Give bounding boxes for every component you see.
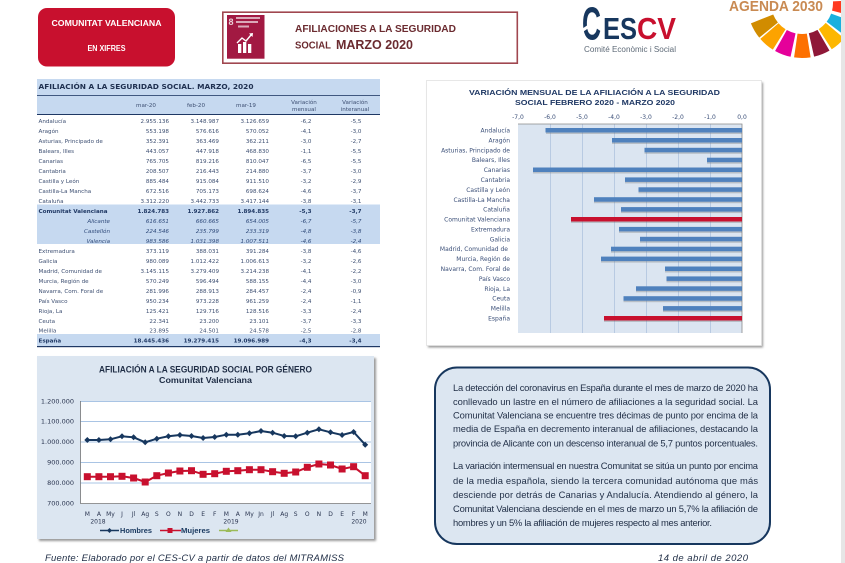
table rows: regions: 208.507 — [146, 169, 169, 175]
table rows: remaining regions: Navarra, Com. Foral de — [38, 289, 104, 295]
chart title: VARIACIÓN MENSUAL DE LA AFILIACIÓN A LA SEGURIDAD — [469, 88, 721, 97]
table rows: regions: -4,1 — [301, 129, 312, 135]
table rows: regions: Castilla-La Mancha — [38, 189, 91, 195]
table rows: remaining regions: -1,1 — [351, 299, 362, 305]
x axis labels: Jl — [270, 511, 275, 518]
line: Mujeres — [84, 460, 369, 486]
plot area — [518, 124, 742, 333]
table rows: regions: Castilla y León — [38, 178, 80, 185]
table header: Variación — [342, 99, 368, 106]
x axis labels: M — [363, 511, 368, 518]
table rows: remaining regions: Galicia — [38, 259, 57, 265]
chart title: SOCIAL FEBRERO 2020 - MARZO 2020 — [515, 98, 675, 107]
table rows: provinces: -5,7 — [351, 219, 362, 225]
table rows: provinces: Alicante — [86, 219, 111, 225]
table rows: remaining regions: -4,4 — [301, 279, 312, 285]
category labels: Castilla-La Mancha — [453, 197, 510, 204]
paragraph 1: Comunitat Valenciana se encuentre tres décimas de punto por encima de la — [453, 410, 759, 420]
table rows: regions: 362.211 — [246, 139, 269, 145]
legend — [100, 526, 238, 535]
table rows: regions: 2.955.136 — [141, 119, 169, 125]
table rows: regions: 3.442.733 — [191, 199, 219, 205]
chart title — [469, 88, 721, 107]
table rows: remaining regions: 980.089 — [146, 259, 169, 265]
x axis labels: O — [305, 511, 310, 518]
line: Hombres — [84, 426, 368, 448]
category labels: Comunitat Valenciana — [444, 216, 510, 224]
logo: CES CV: CV — [637, 11, 676, 46]
table rows: regions: -6,5 — [301, 159, 312, 165]
table rows: regions: -3,0 — [301, 139, 312, 145]
highlighted bands — [37, 204, 380, 347]
category labels: Andalucía — [480, 128, 510, 134]
table header: mar-20 — [136, 103, 156, 109]
paragraph 2 — [453, 460, 759, 528]
table rows: remaining regions: 961.259 — [246, 299, 269, 305]
x axis labels: A — [236, 511, 241, 518]
table rows: regions: 214.880 — [246, 169, 269, 175]
table rows: remaining regions: -2,8 — [351, 328, 362, 334]
table rows: provinces: -3,8 — [351, 229, 362, 235]
x axis labels: Jl — [131, 511, 136, 518]
chart title: Comunitat Valenciana — [159, 376, 253, 385]
table rows: remaining regions: 284.457 — [246, 289, 269, 295]
table rows: provinces — [84, 219, 362, 245]
table rows: regions: -2,9 — [351, 179, 362, 185]
paragraph 2: de la media española, siendo la tercera comunidad autónoma que más — [453, 475, 758, 486]
category labels: Canarias — [484, 167, 510, 174]
table row: Comunitat Valenciana: -3,7 — [349, 209, 362, 215]
x axis labels: 2019 — [223, 518, 239, 526]
badge: Comunitat Valenciana en xifres: EN XIFRES — [88, 44, 126, 53]
table rows: regions: Cantabria — [38, 169, 66, 175]
table rows: remaining regions: 3.279.409 — [191, 269, 219, 275]
table rows: regions: Asturias, Principado de — [38, 139, 103, 145]
table rows: remaining regions — [38, 249, 362, 334]
table rows: provinces: 235.799 — [196, 229, 219, 235]
category labels: Castilla y León — [466, 187, 510, 194]
table rows: remaining regions: Rioja, La — [38, 309, 62, 315]
table rows: remaining regions: -3,3 — [301, 309, 312, 315]
table header: mar-19 — [236, 103, 256, 109]
table rows: remaining regions: -0,9 — [351, 289, 362, 295]
table rows: regions: 765.705 — [146, 159, 169, 165]
paragraph 2: Comunitat Valenciana desciende en el mes de marzo un 5,7% la afiliación de — [453, 503, 758, 514]
table rows: regions: 819.216 — [196, 159, 219, 165]
table rows: remaining regions: -3,0 — [351, 279, 362, 285]
table rows: remaining regions: -2,4 — [351, 309, 362, 315]
x axis labels: My — [245, 511, 254, 518]
table title band — [37, 79, 380, 115]
x axis labels: M — [85, 511, 90, 518]
table rows: regions: -3,0 — [351, 169, 362, 175]
table rows: regions: 447.918 — [196, 149, 219, 155]
table rows: remaining regions: -4,6 — [351, 249, 362, 255]
x axis labels: Ag — [141, 511, 149, 518]
x axis labels: D — [328, 511, 333, 518]
category labels: Cataluña — [483, 207, 510, 214]
table rows: remaining regions: 570.249 — [146, 279, 169, 285]
table rows: remaining regions: 128.516 — [246, 309, 269, 315]
table rows: remaining regions: -2,2 — [351, 269, 362, 275]
table rows: provinces: -4,8 — [301, 229, 312, 235]
table rows: regions: -2,7 — [351, 139, 362, 145]
table rows: remaining regions: 596.494 — [196, 279, 219, 285]
table rows: remaining regions: -2,4 — [301, 289, 312, 295]
x axis labels: -6,0 — [544, 114, 556, 121]
x axis labels: O — [166, 511, 171, 518]
table row: España: -3,4 — [349, 338, 362, 344]
paragraph 2: desciende por detrás de Canarias y Andalucía. Atendiendo al género, la — [453, 489, 759, 500]
table rows: regions: Cataluña — [38, 199, 64, 205]
table rows: regions: 3.417.144 — [241, 199, 269, 205]
table rows: regions: 553.198 — [146, 129, 169, 135]
table rows: regions: 570.052 — [246, 129, 269, 135]
table rows: remaining regions: 24.578 — [249, 328, 269, 334]
table rows: remaining regions: 1.012.422 — [191, 259, 219, 265]
category labels: Madrid, Comunidad de — [440, 246, 508, 253]
table rows: provinces: 1.007.511 — [241, 239, 269, 245]
category labels: Balears, Illes — [472, 157, 510, 164]
table rows: remaining regions: 129.716 — [196, 309, 219, 315]
category labels: Melilla — [491, 306, 510, 313]
table rows: regions: -3,8 — [301, 199, 312, 205]
y axis labels: 1.000.000 — [41, 438, 74, 446]
table rows: regions: -5,5 — [351, 149, 362, 155]
table rows: remaining regions: -2,5 — [301, 328, 312, 334]
chart title: AFILIACIÓN A LA SEGURIDAD SOCIAL POR GÉNERO — [99, 364, 312, 374]
table rows: provinces: -6,7 — [301, 219, 312, 225]
table row: Comunitat Valenciana: -5,3 — [299, 209, 312, 215]
table rows: provinces: 983.586 — [146, 239, 169, 245]
x axis labels — [85, 511, 368, 526]
y axis labels: 900.000 — [47, 458, 74, 466]
category labels: Rioja, La — [484, 286, 510, 293]
x axis labels: J — [120, 511, 123, 518]
chart title — [99, 364, 312, 385]
table row: España: 18.445.436 — [134, 338, 169, 344]
table rows: remaining regions: -4,1 — [301, 269, 312, 275]
table rows: remaining regions: 24.501 — [199, 328, 219, 334]
table rows: regions: -3,7 — [301, 169, 312, 175]
panel: afiliación por género line chart — [37, 356, 376, 541]
table rows: remaining regions: 23.101 — [249, 319, 269, 325]
table rows: regions: 216.443 — [196, 169, 219, 175]
table rows: remaining regions: Melilla — [38, 328, 56, 334]
table rows: provinces: 654.005 — [246, 219, 269, 225]
logo: Agenda 2030 — [729, 0, 845, 70]
table rows: regions: -3,7 — [351, 189, 362, 195]
table rows: regions — [38, 118, 362, 205]
table rows: remaining regions: Ceuta — [38, 319, 55, 325]
table rows: regions: -1,1 — [301, 149, 312, 155]
panel: variación mensual bar chart — [426, 80, 763, 348]
icon: SDG 8 decent work: 8 — [228, 17, 234, 27]
logo: CES CV — [580, 0, 676, 54]
category labels: Murcia, Región de — [456, 256, 510, 263]
table rows: regions: 885.484 — [146, 179, 169, 185]
paragraph 1 — [453, 382, 759, 448]
table rows: remaining regions: 373.119 — [146, 249, 169, 255]
table rows: remaining regions: 3.214.238 — [241, 269, 269, 275]
table row: España — [38, 338, 362, 344]
table row: España: 19.096.989 — [234, 338, 269, 344]
table rows: regions: 915.084 — [196, 179, 219, 185]
title box — [223, 12, 517, 63]
table row: España: -4,3 — [299, 338, 312, 344]
category labels: España — [488, 316, 510, 322]
table rows: regions: 3.312.220 — [141, 199, 169, 205]
y axis labels: 700.000 — [47, 500, 74, 508]
badge: Comunitat Valenciana en xifres: COMUNITAT VALENCIANA — [52, 19, 162, 28]
table rows: regions: Aragón — [38, 128, 59, 135]
x axis labels: D — [189, 511, 194, 518]
table rows: regions: 363.469 — [196, 139, 219, 145]
x axis labels: -7,0 — [512, 114, 524, 121]
table row: Comunitat Valenciana: 1.824.783 — [138, 209, 169, 215]
y axis labels — [41, 398, 74, 508]
table rows: provinces: -2,4 — [351, 239, 362, 245]
table rows: remaining regions: 3.145.115 — [141, 269, 169, 275]
y axis labels: 800.000 — [47, 479, 74, 487]
table rows: provinces: Valencia — [86, 239, 111, 245]
x axis labels: N — [178, 511, 182, 518]
table rows: remaining regions: País Vasco — [38, 298, 68, 305]
table rows: regions: 576.616 — [196, 129, 219, 135]
bars — [533, 128, 742, 322]
table rows: regions: -6,2 — [301, 119, 312, 125]
x axis labels: 0,0 — [737, 114, 747, 121]
category labels: Asturias, Principado de — [441, 147, 510, 154]
table rows: remaining regions: -3,2 — [301, 259, 312, 265]
table rows: regions: 698.624 — [246, 189, 269, 195]
x axis labels: F — [213, 511, 217, 518]
x axis labels: M — [224, 511, 229, 518]
table row: Comunitat Valenciana: Comunitat Valenciana — [38, 209, 108, 215]
table rows: remaining regions: 973.228 — [196, 299, 219, 305]
plot area — [80, 401, 371, 504]
x axis labels: -2,0 — [672, 114, 684, 121]
table rows: remaining regions: Extremadura — [38, 249, 75, 255]
table header: mensual — [292, 107, 316, 113]
table rows: provinces: 233.319 — [246, 229, 269, 235]
x axis labels: -1,0 — [704, 114, 716, 121]
table rows: provinces: 1.031.398 — [191, 239, 219, 245]
table row: España: España — [38, 338, 61, 344]
category labels: País Vasco — [479, 276, 510, 283]
heading: AFILIACIONES A LA SEGURIDAD — [295, 23, 456, 35]
table rows: provinces: 224.546 — [146, 229, 169, 235]
paragraph 2: hombres y un 5% la afiliación de mujeres respecto al mes anterior. — [453, 517, 712, 528]
x axis labels: My — [106, 511, 115, 518]
x axis labels: -4,0 — [608, 114, 620, 121]
table rows: regions: 468.830 — [246, 149, 269, 155]
table rows: regions: 705.173 — [196, 189, 219, 195]
x axis labels: 2018 — [90, 518, 106, 526]
heading: SOCIAL — [295, 40, 331, 52]
category labels: Galicia — [490, 236, 510, 243]
table header — [136, 99, 370, 113]
table rows: regions: 352.391 — [146, 139, 169, 145]
table rows: remaining regions: 23.895 — [149, 328, 169, 334]
table rows: remaining regions: 22.341 — [149, 319, 169, 325]
table rows: regions: 443.057 — [146, 149, 169, 155]
paragraph 1: conllevado un lastre en el número de afiliaciones a la seguridad social. La — [453, 396, 759, 407]
table rows: remaining regions: 588.155 — [246, 279, 269, 285]
x axis labels: Jn — [257, 511, 264, 518]
table rows: remaining regions: 950.234 — [146, 299, 169, 305]
table rows: regions: -5,5 — [351, 159, 362, 165]
table rows: remaining regions: 288.913 — [196, 289, 219, 295]
table rows: remaining regions: 23.200 — [199, 319, 219, 325]
table rows: remaining regions: 391.284 — [246, 249, 269, 255]
table header: feb-20 — [187, 103, 205, 109]
x axis labels: S — [294, 511, 298, 518]
table row: Comunitat Valenciana — [38, 209, 362, 215]
x axis labels: N — [317, 511, 321, 518]
table rows: remaining regions: 281.996 — [146, 289, 169, 295]
table row: Comunitat Valenciana: 1.927.862 — [188, 209, 219, 215]
table row: España: 19.279.415 — [184, 338, 219, 344]
y axis labels: 1.200.000 — [41, 398, 74, 406]
table rows: regions: Balears, Illes — [38, 149, 74, 155]
table rows: provinces: Castellón — [84, 228, 110, 235]
table rows: remaining regions: -2,4 — [301, 299, 312, 305]
badge: Comunitat Valenciana en xifres — [38, 8, 175, 66]
table rows: remaining regions: -3,8 — [301, 249, 312, 255]
table rows: remaining regions: 388.031 — [196, 249, 219, 255]
table rows: regions: 3.126.659 — [241, 119, 269, 125]
icon: SDG 8 decent work — [227, 15, 264, 59]
category labels: Navarra, Com. Foral de — [441, 266, 510, 273]
callout: commentary text box — [435, 368, 770, 544]
table rows: remaining regions: 1.006.613 — [241, 259, 269, 265]
table rows: regions: 3.148.987 — [191, 119, 219, 125]
heading: MARZO 2020 — [336, 38, 413, 52]
category labels: Cantabria — [481, 177, 510, 184]
table rows: regions: 672.516 — [146, 189, 169, 195]
x axis labels: 2020 — [351, 518, 367, 526]
table rows: regions: 810.047 — [246, 159, 269, 165]
legend: Hombres — [120, 526, 152, 535]
y axis labels: 1.100.000 — [41, 418, 74, 426]
paragraph 1: La detección del coronavirus en España durante el mes de marzo de 2020 ha — [453, 382, 759, 393]
paragraph 1: provincia de Alicante con un descenso interanual de 5,7 puntos porcentuales. — [453, 438, 758, 448]
paragraph 1: media de España en decremento interanual de afiliaciones, destacando la — [453, 423, 759, 434]
table rows: regions: -3,0 — [351, 129, 362, 135]
table rows: remaining regions: -3,3 — [351, 319, 362, 325]
heading — [295, 23, 456, 52]
table rows: regions: -3,1 — [351, 199, 362, 205]
x axis labels: S — [155, 511, 159, 518]
icon: SDG wheel segments — [741, 0, 845, 64]
table rows: provinces: 660.665 — [196, 219, 219, 225]
table rows: remaining regions: -2,6 — [351, 259, 362, 265]
x axis labels: Ag — [280, 511, 288, 518]
table rows: remaining regions: -3,7 — [301, 319, 312, 325]
table: afiliación a la seguridad social — [37, 79, 380, 347]
table rows: remaining regions: Murcia, Región de — [38, 278, 89, 285]
x axis labels: F — [352, 511, 356, 518]
table rows: regions: -3,2 — [301, 179, 312, 185]
x axis labels: -3,0 — [640, 114, 652, 121]
paragraph 2: La variación intermensual en nuestra Comunitat se sitúa un punto por encima — [453, 460, 759, 471]
table row: Comunitat Valenciana: 1.894.835 — [238, 209, 269, 215]
logo: CES CV: Comité Econòmic i Social — [584, 45, 676, 54]
category labels: Extremadura — [471, 226, 510, 233]
x axis labels: A — [97, 511, 102, 518]
x axis labels: E — [201, 511, 205, 518]
table header: Variación — [291, 99, 317, 106]
table title band: AFILIACIÓN A LA SEGURIDAD SOCIAL. MARZO, 2020 — [38, 82, 254, 91]
table rows: remaining regions: Madrid, Comunidad de — [38, 269, 103, 275]
category labels: Aragón — [488, 137, 510, 144]
table header: interanual — [341, 107, 370, 113]
category labels: Ceuta — [492, 296, 510, 303]
x axis labels: E — [340, 511, 344, 518]
table rows: regions: -4,6 — [301, 189, 312, 195]
table rows: remaining regions: 125.421 — [146, 309, 169, 315]
table rows: provinces: 616.651 — [146, 219, 169, 225]
x axis labels — [512, 114, 747, 121]
legend: Mujeres — [181, 526, 210, 535]
logo: CES CV: ES — [603, 11, 637, 46]
category labels — [440, 128, 510, 322]
table rows: regions: Andalucía — [38, 118, 66, 125]
table rows: regions: Canarias — [38, 159, 63, 165]
table rows: regions: 911.510 — [246, 179, 269, 185]
x axis labels: -5,0 — [576, 114, 588, 121]
table rows: regions: -5,5 — [351, 119, 362, 125]
table rows: provinces: -4,6 — [301, 239, 312, 245]
